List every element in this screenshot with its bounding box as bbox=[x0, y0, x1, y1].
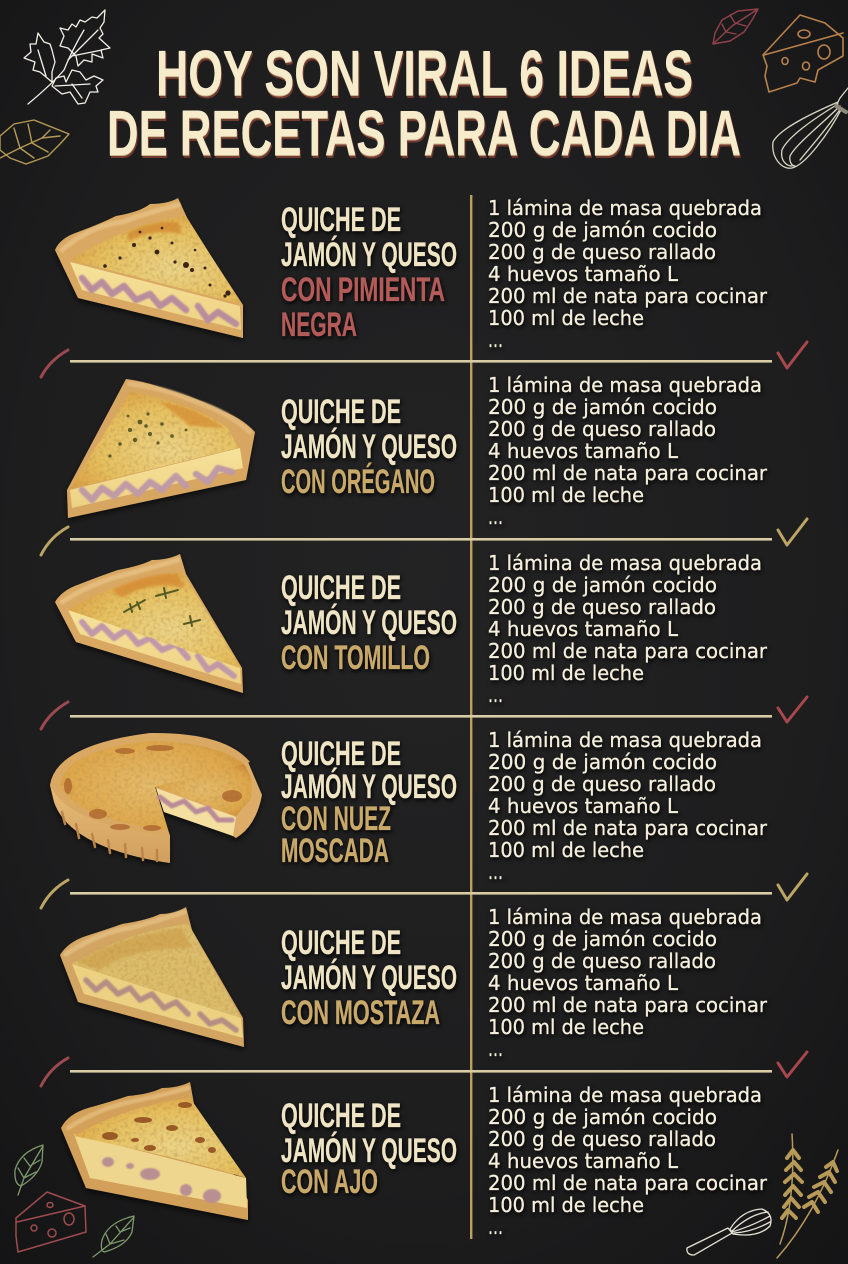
check marks and chalk ticks bbox=[41, 342, 807, 1086]
recipe name: JAMÓN Y QUESO bbox=[281, 604, 457, 642]
ingredients list: 200 g de jamón cocido bbox=[488, 573, 717, 597]
recipe name: QUICHE DE bbox=[281, 735, 401, 773]
recipe name: NEGRA bbox=[281, 306, 357, 344]
ingredients list: ... bbox=[488, 1215, 503, 1239]
recipe name: JAMÓN Y QUESO bbox=[281, 768, 457, 806]
recipe name bbox=[281, 1097, 457, 1201]
ingredients list: 200 g de jamón cocido bbox=[488, 1105, 717, 1129]
ingredients list: 4 huevos tamaño L bbox=[488, 1149, 679, 1173]
recipe name: QUICHE DE bbox=[281, 569, 401, 607]
ingredients list: 1 lámina de masa quebrada bbox=[488, 1083, 762, 1107]
ingredients list: 4 huevos tamaño L bbox=[488, 439, 679, 463]
recipe name: QUICHE DE bbox=[281, 201, 401, 239]
ingredients list: 200 g de jamón cocido bbox=[488, 218, 717, 242]
icon: red leaf bbox=[713, 9, 758, 44]
ingredients list: ... bbox=[488, 860, 503, 884]
ingredients list: 200 g de queso rallado bbox=[488, 772, 716, 796]
recipe name bbox=[281, 201, 457, 344]
title bbox=[107, 37, 741, 169]
recipe name: QUICHE DE bbox=[281, 1097, 401, 1135]
row 1 bbox=[55, 196, 768, 352]
recipe name bbox=[281, 924, 457, 1032]
ingredients list: 4 huevos tamaño L bbox=[488, 262, 679, 286]
recipe name: JAMÓN Y QUESO bbox=[281, 236, 457, 274]
ingredients list bbox=[488, 728, 768, 884]
icon: green leaf bottom bbox=[93, 1216, 134, 1257]
quiche slice with oregano bbox=[67, 379, 255, 518]
ingredients list: 100 ml de leche bbox=[488, 661, 644, 685]
recipe name: MOSCADA bbox=[281, 832, 389, 870]
ingredients list: 100 ml de leche bbox=[488, 483, 644, 507]
recipe name: JAMÓN Y QUESO bbox=[281, 1132, 457, 1170]
ingredients list: 100 ml de leche bbox=[488, 1015, 644, 1039]
ingredients list: 1 lámina de masa quebrada bbox=[488, 551, 762, 575]
recipe name: QUICHE DE bbox=[281, 393, 401, 431]
ingredients list: 4 huevos tamaño L bbox=[488, 794, 679, 818]
whole quiche with slice removed bbox=[50, 733, 262, 863]
quiche slice with garlic bbox=[61, 1082, 248, 1220]
row 5 bbox=[60, 905, 768, 1061]
row 3 bbox=[55, 551, 768, 707]
recipe name: CON PIMIENTA bbox=[281, 271, 445, 309]
recipe name: CON ORÉGANO bbox=[281, 463, 435, 501]
ingredients list: 200 ml de nata para cocinar bbox=[488, 993, 768, 1017]
recipe name: CON NUEZ bbox=[281, 800, 391, 838]
ingredients list: 200 ml de nata para cocinar bbox=[488, 1171, 768, 1195]
ingredients list: ... bbox=[488, 505, 503, 529]
ingredients list: 1 lámina de masa quebrada bbox=[488, 373, 762, 397]
quiche slice with mustard bbox=[60, 907, 244, 1047]
ingredients list: 100 ml de leche bbox=[488, 838, 644, 862]
ingredients list: 200 g de jamón cocido bbox=[488, 395, 717, 419]
ingredients list: 100 ml de leche bbox=[488, 306, 644, 330]
icon: parsley bbox=[24, 10, 110, 104]
ingredients list: 200 g de queso rallado bbox=[488, 1127, 716, 1151]
recipe name: CON TOMILLO bbox=[281, 639, 430, 677]
icon: gold leaf bbox=[0, 120, 69, 164]
ingredients list: ... bbox=[488, 683, 503, 707]
icon: cheese bbox=[763, 15, 843, 92]
row dividers bbox=[70, 360, 772, 1073]
recipe name bbox=[281, 393, 457, 501]
icon: wheat stalks bbox=[777, 1134, 838, 1258]
recipe name bbox=[281, 735, 457, 870]
ingredients list: ... bbox=[488, 328, 503, 352]
ingredients list: 200 g de queso rallado bbox=[488, 595, 716, 619]
row 4 bbox=[50, 728, 768, 884]
recipe name: QUICHE DE bbox=[281, 924, 401, 962]
ingredients list bbox=[488, 1083, 768, 1239]
ingredients list: 200 g de queso rallado bbox=[488, 949, 716, 973]
row 2 bbox=[67, 373, 768, 529]
icon: whisk bottom bbox=[687, 1209, 771, 1255]
ingredients list: 200 ml de nata para cocinar bbox=[488, 461, 768, 485]
row 6 bbox=[61, 1082, 768, 1239]
recipe name: CON AJO bbox=[281, 1163, 378, 1201]
ingredients list: 4 huevos tamaño L bbox=[488, 617, 679, 641]
icon: green leaf left bbox=[15, 1145, 43, 1195]
ingredients list: 200 ml de nata para cocinar bbox=[488, 639, 768, 663]
ingredients list bbox=[488, 551, 768, 707]
quiche slice with thyme bbox=[55, 554, 243, 693]
ingredients list: 100 ml de leche bbox=[488, 1193, 644, 1217]
recipe name: CON MOSTAZA bbox=[281, 994, 440, 1032]
quiche slice with black pepper bbox=[55, 198, 243, 338]
ingredients list: 4 huevos tamaño L bbox=[488, 971, 679, 995]
ingredients list: 200 g de jamón cocido bbox=[488, 750, 717, 774]
ingredients list bbox=[488, 373, 768, 529]
recipe name: JAMÓN Y QUESO bbox=[281, 959, 457, 997]
ingredients list: 200 g de jamón cocido bbox=[488, 927, 717, 951]
ingredients list: 1 lámina de masa quebrada bbox=[488, 728, 762, 752]
ingredients list: 200 g de queso rallado bbox=[488, 417, 716, 441]
recipe name: JAMÓN Y QUESO bbox=[281, 428, 457, 466]
recipe name bbox=[281, 569, 457, 677]
icon: whisk top bbox=[773, 88, 848, 168]
ingredients list: 1 lámina de masa quebrada bbox=[488, 905, 762, 929]
icon: red cheese bbox=[16, 1192, 86, 1252]
ingredients list: ... bbox=[488, 1037, 503, 1061]
vertical divider bbox=[470, 195, 472, 1239]
ingredients list: 200 ml de nata para cocinar bbox=[488, 284, 768, 308]
ingredients list: 1 lámina de masa quebrada bbox=[488, 196, 762, 220]
ingredients list bbox=[488, 196, 768, 352]
ingredients list: 200 g de queso rallado bbox=[488, 240, 716, 264]
ingredients list: 200 ml de nata para cocinar bbox=[488, 816, 768, 840]
ingredients list bbox=[488, 905, 768, 1061]
